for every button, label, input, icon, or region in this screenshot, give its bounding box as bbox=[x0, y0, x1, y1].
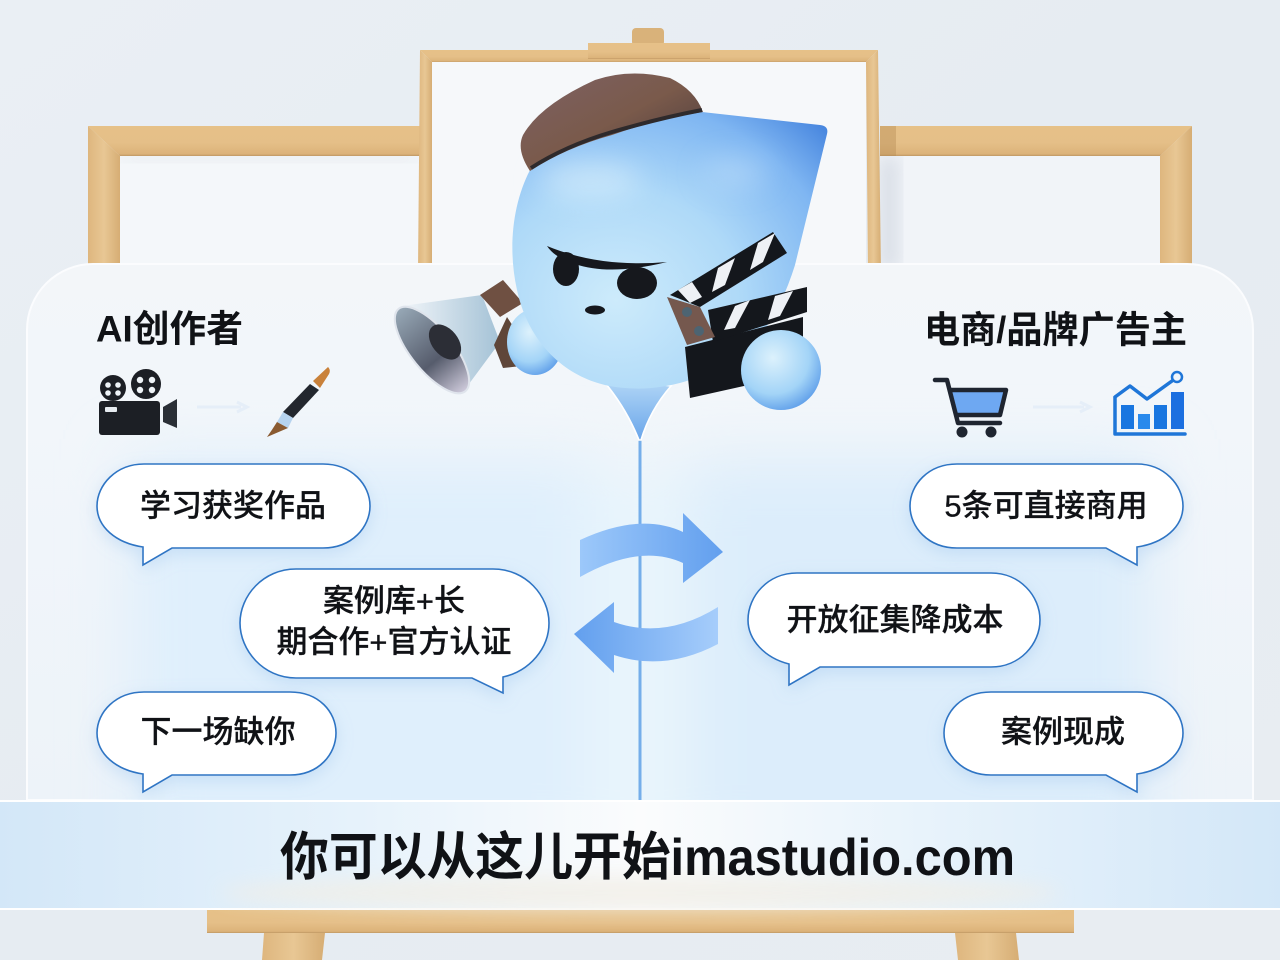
easel: bottom shelf bbox=[207, 910, 1074, 933]
speech bubble: 下一场缺你: 下一场缺你 bbox=[140, 714, 296, 750]
frosted panel bbox=[26, 263, 1254, 800]
arrow: exchange to the left bbox=[574, 602, 718, 673]
easel: lower legs bbox=[262, 933, 1019, 960]
arrow: exchange to the right bbox=[580, 513, 723, 583]
clapperboard bbox=[667, 232, 807, 398]
speech bubble: 开放征集降成本 bbox=[748, 573, 1040, 685]
easel: centre canvas frame bbox=[418, 50, 881, 272]
easel: top ledge and peg bbox=[588, 28, 710, 59]
bottom banner bbox=[0, 801, 1280, 911]
mascot body highlights bbox=[540, 158, 767, 198]
mascot drip tail bbox=[600, 377, 671, 440]
icon: paint brush bbox=[267, 367, 330, 437]
speech bubble: 案例库+长期合作+官方认证: 期合作+官方认证 bbox=[276, 624, 512, 660]
speech bubble: 案例现成: 案例现成 bbox=[1001, 714, 1125, 750]
speech bubble: 下一场缺你 bbox=[97, 692, 336, 792]
call to action text: 你可以从这儿开始imastudio.com bbox=[280, 829, 1015, 887]
mascot: blue droplet director bbox=[382, 73, 827, 440]
speech bubble: 案例库+长期合作+官方认证: 案例库+长 bbox=[323, 584, 465, 618]
speech bubble: 学习获奖作品: 学习获奖作品 bbox=[140, 488, 326, 524]
mascot droplet body bbox=[512, 112, 827, 389]
speech bubble: 开放征集降成本: 开放征集降成本 bbox=[786, 602, 1004, 638]
icon: shopping cart bbox=[935, 380, 1006, 438]
mascot face bbox=[547, 246, 667, 314]
speech bubble: 5条可直接商用 bbox=[910, 464, 1183, 565]
icon: film camera bbox=[99, 369, 177, 435]
mascot beret bbox=[521, 73, 703, 171]
arrow: cart to chart bbox=[1033, 402, 1090, 412]
heading: e-commerce and brand advertisers: 电商/品牌广告主 bbox=[924, 310, 1187, 350]
speech bubble: 5条可直接商用: 5条可直接商用 bbox=[944, 488, 1148, 524]
icon: growth bar chart bbox=[1115, 372, 1185, 434]
speech bubble: 案例现成 bbox=[944, 692, 1183, 792]
centre divider line bbox=[638, 430, 642, 801]
arrow: camera to brush bbox=[197, 402, 247, 412]
easel: right canvas frame bbox=[880, 126, 1192, 271]
speech bubble: 案例库+长期合作+官方认证 bbox=[240, 569, 549, 693]
heading: AI creators: AI创作者 bbox=[96, 308, 243, 350]
easel: left canvas frame bbox=[88, 126, 420, 271]
speech bubble: 学习获奖作品 bbox=[97, 464, 370, 565]
mascot right hand bbox=[741, 330, 821, 410]
mascot left hand bbox=[507, 309, 563, 375]
megaphone bbox=[382, 280, 523, 404]
